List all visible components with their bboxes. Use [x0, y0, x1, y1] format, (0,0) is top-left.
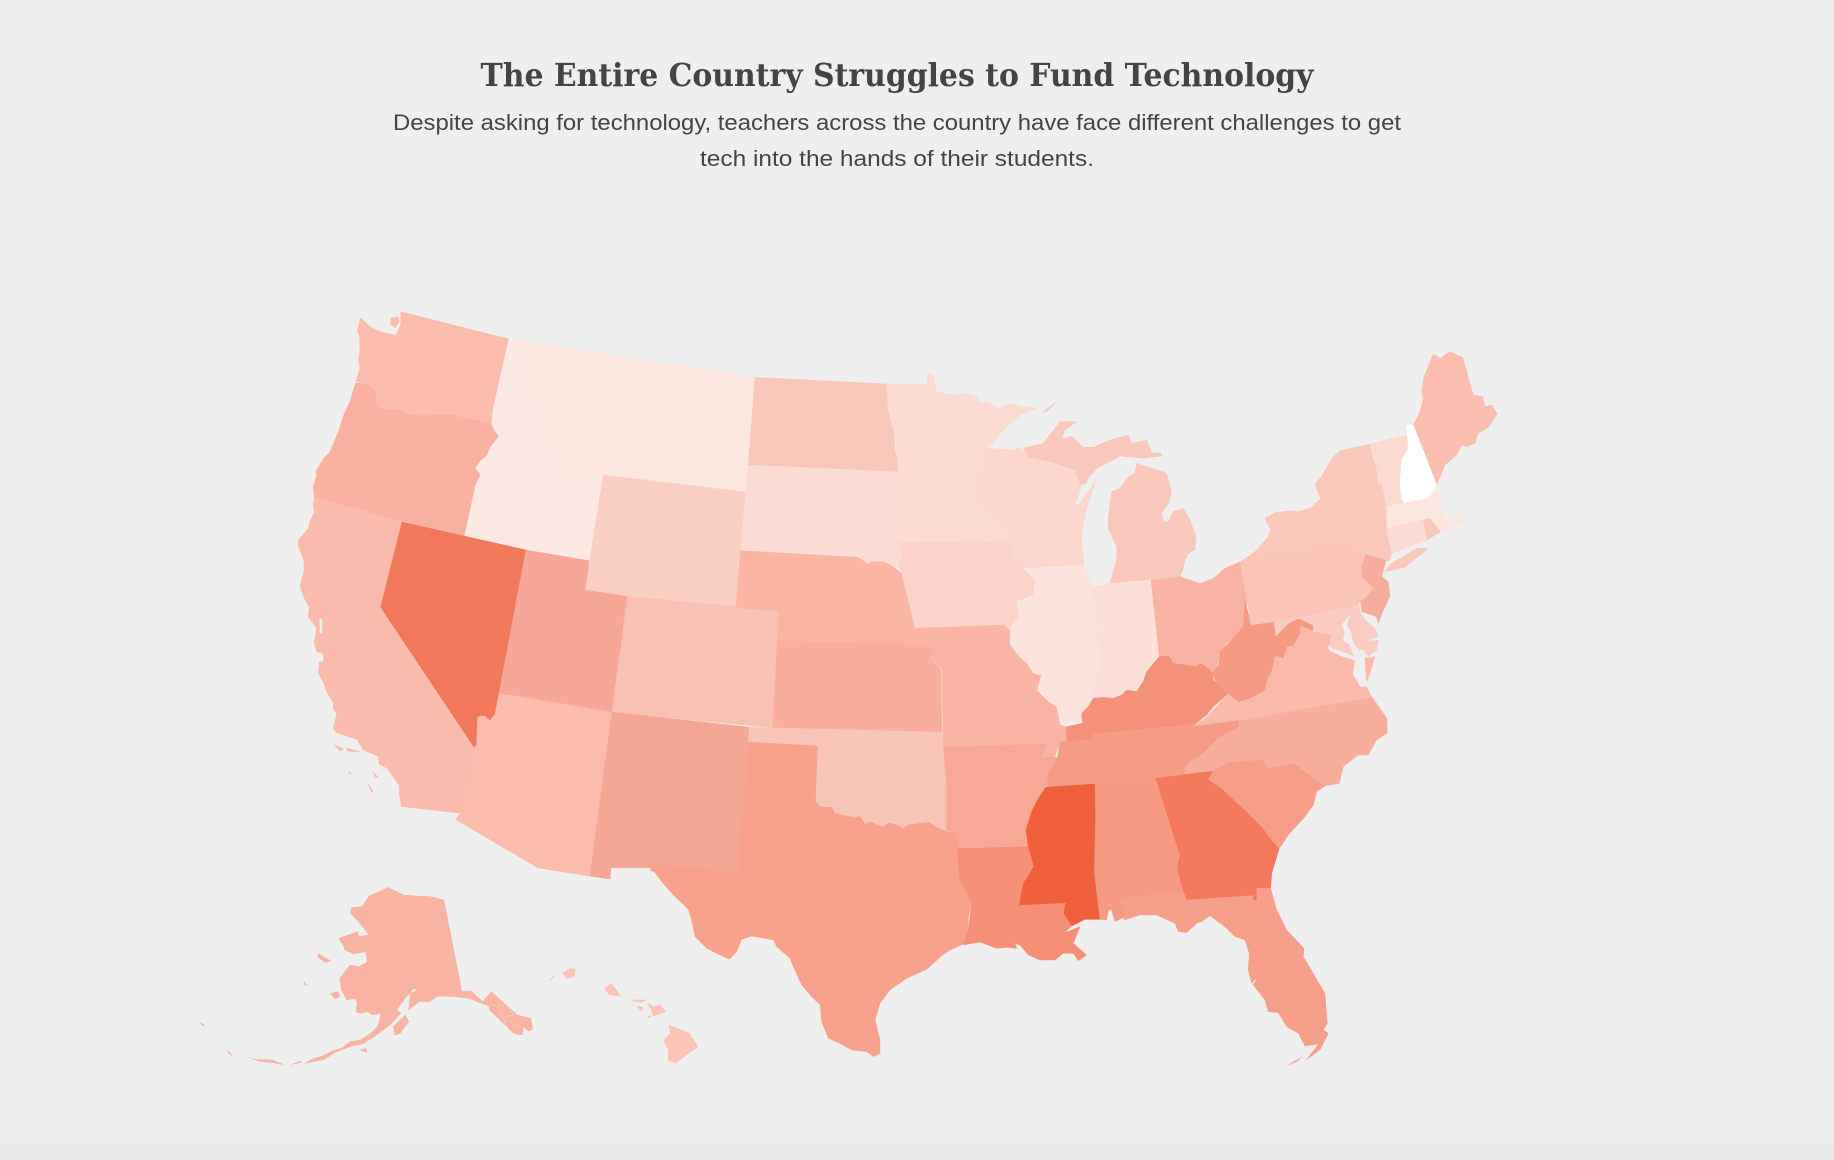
state: Washington — [356, 312, 508, 424]
subtitle: tech into the hands of their students. — [700, 146, 1094, 171]
state: Massachusetts — [1387, 492, 1465, 533]
state: Montana — [508, 339, 755, 492]
state: Nebraska — [736, 551, 924, 645]
state: Idaho — [464, 339, 603, 561]
state: Missouri — [915, 625, 1067, 758]
midwest states — [887, 373, 1247, 758]
state: Pennsylvania — [1241, 539, 1373, 625]
Green Bay — [1076, 468, 1098, 505]
subtitle — [393, 110, 1401, 171]
state: Minnesota — [887, 373, 1037, 543]
state: Rhode Island — [1423, 518, 1441, 540]
state: New York — [1255, 444, 1428, 572]
plains states — [736, 377, 942, 732]
state: Connecticut — [1387, 520, 1427, 553]
state: Louisiana — [958, 847, 1087, 961]
state: Oklahoma — [748, 727, 947, 832]
northeastern states — [1193, 352, 1497, 726]
state: Arkansas — [943, 744, 1058, 849]
state: Florida — [1118, 888, 1328, 1065]
state: Georgia — [1156, 771, 1279, 901]
state: Michigan — [1023, 402, 1196, 583]
state: Vermont — [1370, 435, 1408, 507]
state: New Jersey — [1361, 554, 1390, 623]
state: Nevada — [381, 522, 526, 747]
state: South Dakota — [741, 465, 901, 567]
state: South Carolina — [1208, 760, 1325, 848]
state: Illinois — [1010, 565, 1100, 727]
state: New Mexico — [590, 712, 749, 879]
state: Colorado — [612, 596, 779, 728]
western states — [298, 312, 779, 879]
southern states — [943, 697, 1387, 1065]
state: Mississippi — [1019, 784, 1100, 926]
map of the United States — [200, 312, 1497, 1065]
state: Maine — [1413, 352, 1497, 485]
state: Tennessee — [1047, 720, 1239, 787]
state: Virginia — [1193, 625, 1375, 726]
state: Alabama — [1094, 778, 1183, 922]
state: West Virginia — [1212, 600, 1313, 702]
state: Hawaii — [550, 968, 698, 1063]
state: Oregon — [313, 383, 498, 537]
state: Maryland — [1274, 606, 1378, 658]
state: Arizona — [456, 694, 612, 876]
south central states — [651, 727, 972, 1057]
state: Indiana — [1088, 580, 1159, 707]
state: Wyoming — [585, 475, 745, 608]
title: The Entire Country Struggles to Fund Technology — [480, 56, 1315, 94]
state: Texas — [651, 742, 972, 1057]
state: Iowa — [898, 541, 1035, 632]
Chesapeake Bay and Potomac — [1328, 615, 1367, 687]
state: North Dakota — [748, 377, 899, 472]
state: Wisconsin — [975, 447, 1097, 568]
state: Kansas — [772, 641, 942, 732]
state: California — [298, 497, 482, 813]
state: New Hampshire — [1400, 425, 1437, 503]
state: Alaska — [200, 887, 533, 1064]
state: Kentucky — [1067, 656, 1228, 742]
state: North Carolina — [1185, 697, 1387, 786]
subtitle: Despite asking for technology, teachers across the country have face different challenges to get — [393, 110, 1401, 135]
state: Utah — [499, 550, 628, 712]
state: Delaware — [1354, 602, 1378, 642]
state: Ohio — [1151, 562, 1247, 672]
